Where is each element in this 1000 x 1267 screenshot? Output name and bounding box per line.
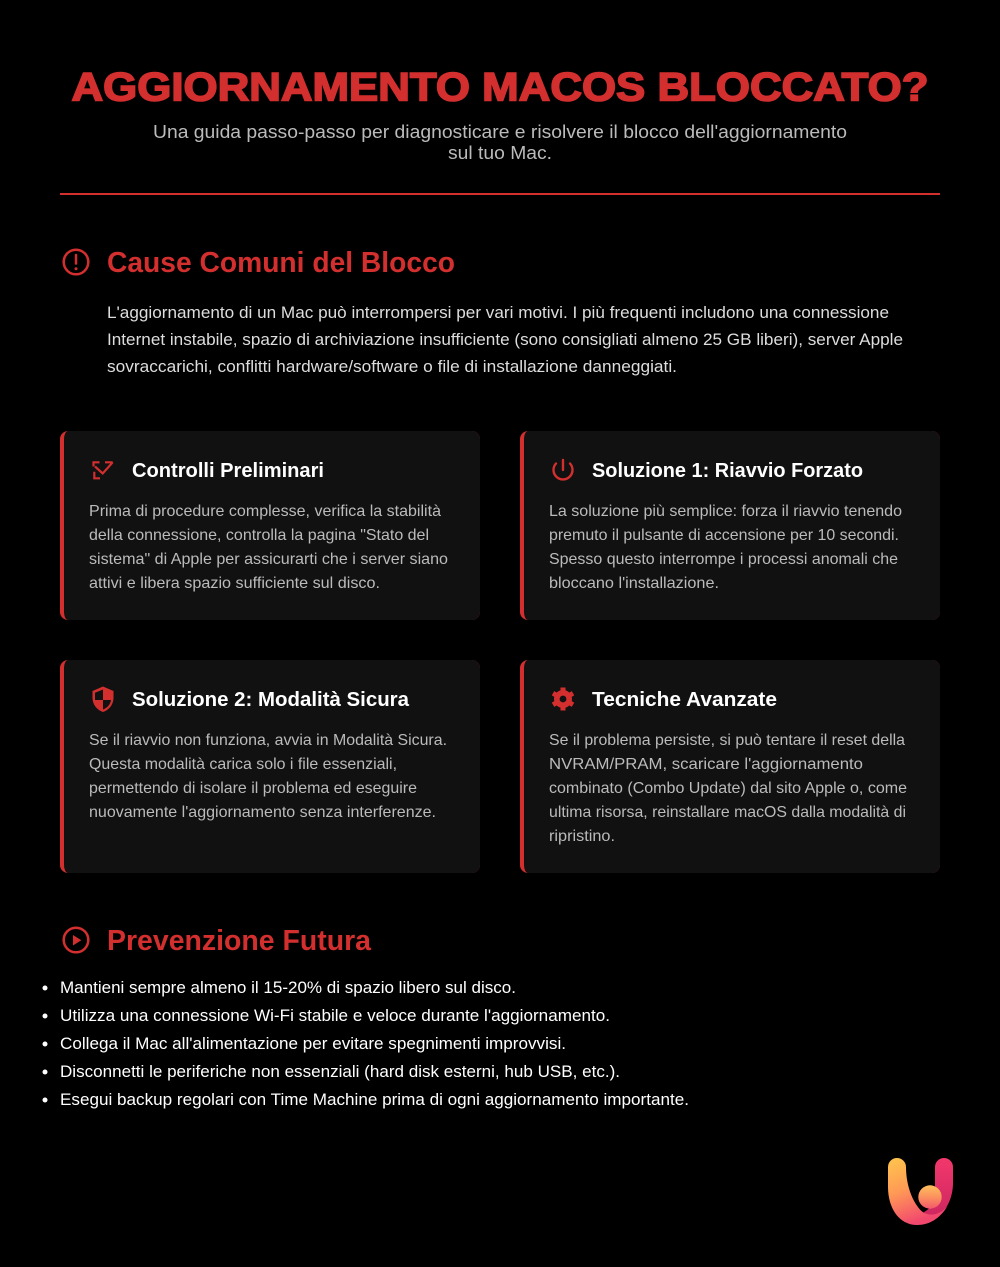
card title: Soluzione 2: Modalità Sicura xyxy=(132,688,410,711)
card text xyxy=(89,503,448,592)
card text: La soluzione più semplice: forza il riavvio tenendo xyxy=(549,503,902,520)
card text: Se il problema persiste, si può tentare il reset della xyxy=(549,732,905,749)
card text: combinato (Combo Update) dal sito Apple o, come xyxy=(549,780,907,797)
icon: play circle xyxy=(64,928,88,952)
panel: riavvio forzato xyxy=(520,431,940,620)
icon: checked frame xyxy=(94,462,113,478)
card text: della connessione, controlla la pagina "Stato del xyxy=(89,527,429,544)
card text: Prima di procedure complesse, verifica la stabilità xyxy=(89,503,441,520)
subtitle: Una guida passo-passo per diagnosticare e risolvere il blocco dell'aggiornamento xyxy=(153,121,847,142)
card title: Controlli Preliminari xyxy=(132,459,324,482)
panel: tecniche avanzate xyxy=(520,660,940,873)
card text xyxy=(89,732,447,821)
list: prevention tips: Utilizza una connessione Wi-Fi stabile e veloce durante l'aggiornamento. xyxy=(60,1006,610,1025)
section: cause comuni xyxy=(64,247,903,376)
title: AGGIORNAMENTO MACOS BLOCCATO? xyxy=(72,66,928,110)
card text: NVRAM/PRAM, scaricare l'aggiornamento xyxy=(549,756,863,773)
card text: nuovamente l'aggiornamento senza interferenze. xyxy=(89,804,436,821)
text block: cause comuni: sovraccarichi, conflitti hardware/software o file di installazione danneggiati. xyxy=(107,357,677,376)
section: prevenzione futura xyxy=(42,925,689,1109)
icon: shield xyxy=(92,686,114,712)
subtitle: sul tuo Mac. xyxy=(448,142,552,163)
text block: cause comuni xyxy=(107,303,903,376)
icon: alert circle xyxy=(64,250,88,274)
text block: cause comuni: Internet instabile, spazio di archiviazione insufficiente (sono consigliati almeno 25 GB liberi), server Apple xyxy=(107,330,903,349)
card text: Questa modalità carica solo i file essenziali, xyxy=(89,756,397,773)
card text: bloccano l'installazione. xyxy=(549,575,719,592)
card text: Se il riavvio non funziona, avvia in Modalità Sicura. xyxy=(89,732,447,749)
card text: ultima risorsa, reinstallare macOS dalla modalità di xyxy=(549,804,906,821)
logo xyxy=(888,1158,953,1225)
icon: power xyxy=(554,460,573,479)
heading: prevenzione futura: Prevenzione Futura xyxy=(107,925,372,957)
subtitle xyxy=(153,121,847,163)
card text: permettendo di isolare il problema ed eseguire xyxy=(89,780,417,797)
card text xyxy=(549,732,907,845)
list: prevention tips xyxy=(42,978,689,1109)
list: prevention tips: Collega il Mac all'alimentazione per evitare spegnimenti improvvisi. xyxy=(60,1034,566,1053)
heading: cause comuni: Cause Comuni del Blocco xyxy=(107,247,455,279)
panel: controlli preliminari xyxy=(60,431,480,620)
card title: Tecniche Avanzate xyxy=(592,688,777,711)
list: prevention tips: Mantieni sempre almeno il 15-20% di spazio libero sul disco. xyxy=(60,978,516,997)
card text: Spesso questo interrompe i processi anomali che xyxy=(549,551,898,568)
list: prevention tips: Disconnetti le periferiche non essenziali (hard disk esterni, hub USB, etc.). xyxy=(60,1062,620,1081)
list: prevention tips: Esegui backup regolari con Time Machine prima di ogni aggiornamento importante. xyxy=(60,1090,689,1109)
card title: Soluzione 1: Riavvio Forzato xyxy=(592,459,863,482)
card text: ripristino. xyxy=(549,828,615,845)
card text: attivi e libera spazio sufficiente sul disco. xyxy=(89,575,380,592)
panel: modalita sicura xyxy=(60,660,480,873)
card text: sistema" di Apple per assicurarti che i server siano xyxy=(89,551,448,568)
text block: cause comuni: L'aggiornamento di un Mac può interrompersi per vari motivi. I più frequenti includono una connessione xyxy=(107,303,889,322)
icon: gear xyxy=(553,688,573,710)
card text: premuto il pulsante di accensione per 10 secondi. xyxy=(549,527,899,544)
card text xyxy=(549,503,902,592)
